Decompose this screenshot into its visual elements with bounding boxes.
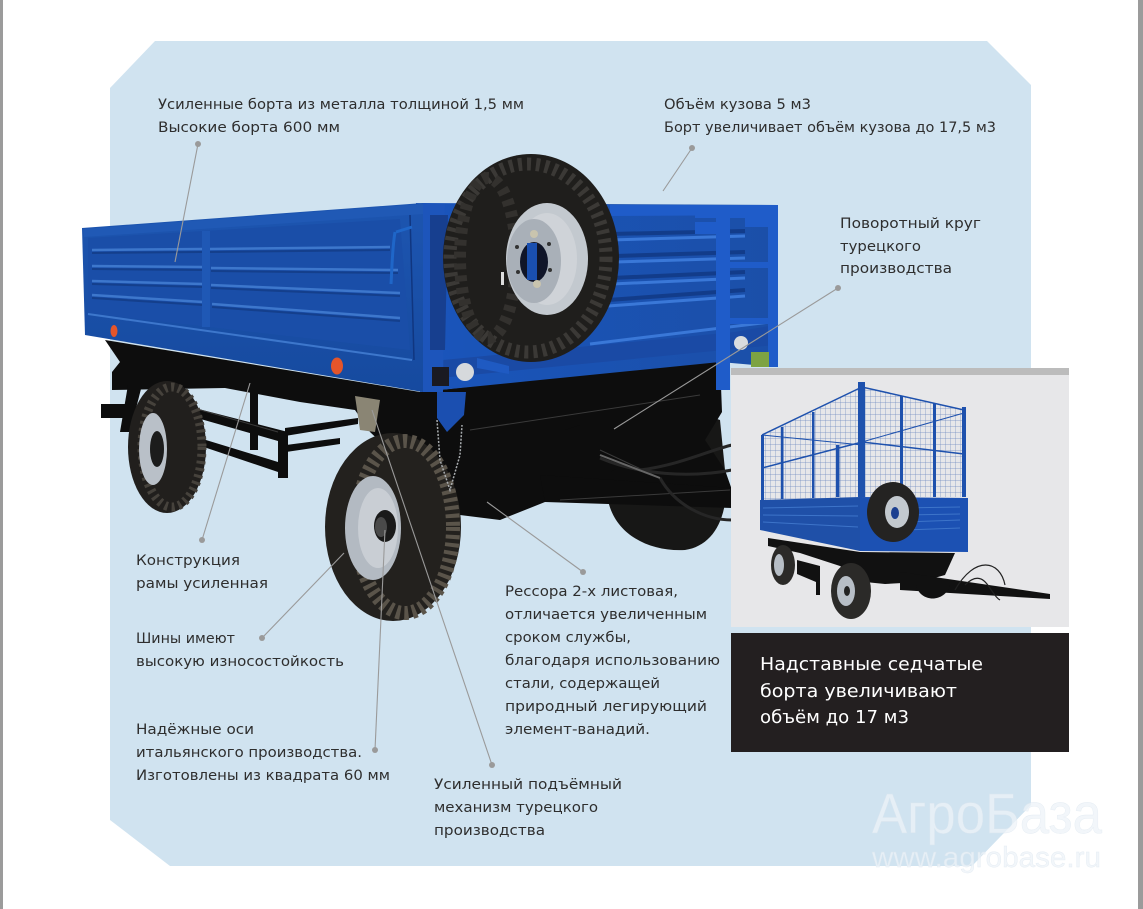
text: frame: Конструкция xyxy=(136,553,240,569)
panel: black callout: борта увеличивают xyxy=(760,682,957,702)
inset body xyxy=(760,497,860,551)
frame highlights xyxy=(183,395,730,500)
text: leaf spring xyxy=(505,584,720,738)
front wheel xyxy=(325,433,461,621)
leader lines xyxy=(175,141,841,768)
text: borders: Усиленные борта из металла толщиной 1,5 мм xyxy=(158,97,524,113)
text: leaf spring: стали, содержащей xyxy=(505,676,660,692)
hydraulic hoses xyxy=(600,445,732,520)
panel: black callout: объём до 17 м3 xyxy=(760,708,909,728)
mounting plate for spare xyxy=(477,358,509,374)
text: frame: рамы усиленная xyxy=(136,576,268,592)
text: leaf spring: элемент-ванадий. xyxy=(505,722,650,738)
panel: black callout xyxy=(731,633,1069,752)
trailer main photo illustration xyxy=(82,154,778,621)
orange reflectors xyxy=(110,325,343,374)
spare wheel xyxy=(443,154,619,362)
panel: inset photo with cage trailer xyxy=(731,368,1069,627)
text: turntable: Поворотный круг xyxy=(840,216,981,232)
text: turntable: производства xyxy=(840,261,952,277)
text: axles xyxy=(136,722,390,784)
text: borders: Высокие борта 600 мм xyxy=(158,120,340,136)
suspension block and chain xyxy=(355,396,380,432)
text: lifting mechanism xyxy=(434,777,622,839)
text: axles: итальянского производства. xyxy=(136,745,362,761)
text: tyres: высокую износостойкость xyxy=(136,654,344,670)
far wheel xyxy=(608,410,726,550)
text: axles: Изготовлены из квадрата 60 мм xyxy=(136,768,390,784)
text: leaf spring: отличается увеличенным xyxy=(505,607,707,623)
front face ribs xyxy=(590,236,770,344)
cage mesh xyxy=(761,382,966,500)
text: leaf spring: сроком службы, xyxy=(505,630,631,646)
text: tyres: Шины имеют xyxy=(136,631,236,647)
text: leaf spring: Рессора 2-х листовая, xyxy=(505,584,678,600)
inset undercarriage xyxy=(768,538,1050,599)
text: turntable: турецкого xyxy=(840,239,921,255)
panel: light blue background xyxy=(110,41,1031,866)
front face posts xyxy=(610,205,778,390)
text: tyres xyxy=(136,631,344,670)
panel: black callout: Надставные седчатые xyxy=(760,655,983,675)
text: turntable xyxy=(840,216,981,277)
side post xyxy=(202,231,210,327)
text: lifting mechanism: Усиленный подъёмный xyxy=(434,777,622,793)
side ribs xyxy=(88,247,412,360)
watermark xyxy=(871,782,1102,874)
bolts and lamps xyxy=(432,336,769,386)
side of body xyxy=(82,203,423,392)
text: frame xyxy=(136,553,268,592)
drawbar bracket xyxy=(437,392,466,432)
text: body volume: Борт увеличивает объём кузова до 17,5 м3 xyxy=(664,120,996,136)
text: lifting mechanism: производства xyxy=(434,823,545,839)
inset spare wheel xyxy=(867,482,919,542)
text: lifting mechanism: механизм турецкого xyxy=(434,800,598,816)
undercarriage black frame xyxy=(101,340,732,520)
text: body volume xyxy=(664,97,996,136)
text: borders xyxy=(158,97,524,136)
rear wheel xyxy=(128,381,206,513)
watermark: www.agrobase.ru xyxy=(871,842,1101,874)
text: body volume: Объём кузова 5 м3 xyxy=(664,97,811,113)
corner post xyxy=(410,203,445,392)
inset wheels xyxy=(771,545,795,585)
watermark: АгроБаза xyxy=(872,782,1102,846)
text: leaf spring: благодаря использованию xyxy=(505,653,720,669)
text: leaf spring: природный легирующий xyxy=(505,699,707,715)
latch handle xyxy=(391,227,412,284)
text: axles: Надёжные оси xyxy=(136,722,254,738)
front face of body xyxy=(420,203,778,392)
